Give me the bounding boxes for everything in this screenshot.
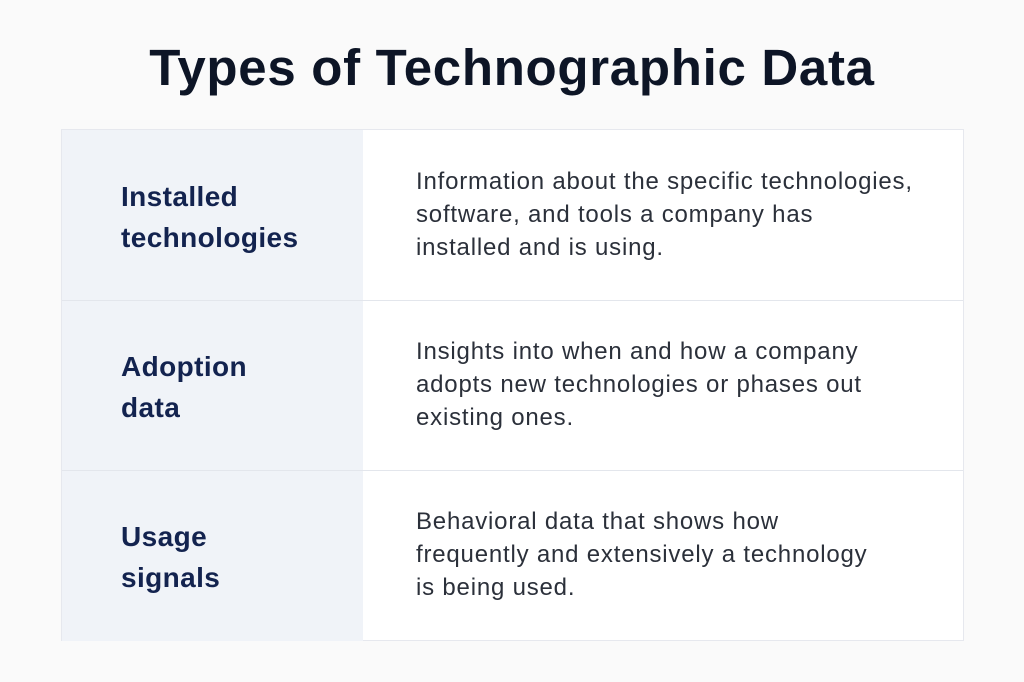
label: installed technologies: technologies bbox=[121, 222, 298, 253]
row: usage signals bbox=[62, 470, 963, 641]
row: adoption data bbox=[62, 300, 963, 471]
description: usage signals: Behavioral data that shows how bbox=[416, 508, 779, 535]
description: adoption data: Insights into when and how a company bbox=[416, 338, 858, 365]
description: installed technologies: Information about the specific technologies, bbox=[416, 168, 913, 195]
label: usage signals: signals bbox=[121, 562, 220, 593]
description: installed technologies: software, and tools a company has bbox=[416, 201, 813, 228]
label: installed technologies bbox=[62, 130, 363, 300]
label: usage signals: Usage bbox=[121, 521, 207, 552]
row: installed technologies bbox=[62, 130, 913, 300]
label: adoption data: data bbox=[121, 392, 180, 423]
description: usage signals: is being used. bbox=[416, 574, 575, 601]
label: adoption data: Adoption bbox=[121, 351, 247, 382]
title: Types of Technographic Data bbox=[149, 39, 875, 96]
label: installed technologies: Installed bbox=[121, 181, 238, 212]
description: usage signals bbox=[416, 508, 867, 601]
table bbox=[61, 129, 964, 641]
description: installed technologies: installed and is using. bbox=[416, 234, 664, 261]
description: usage signals: frequently and extensively a technology bbox=[416, 541, 867, 568]
description: adoption data: adopts new technologies or phases out bbox=[416, 371, 862, 398]
label: usage signals bbox=[62, 471, 363, 641]
label: adoption data bbox=[62, 301, 363, 471]
description: installed technologies bbox=[416, 168, 913, 261]
description: adoption data bbox=[416, 338, 862, 431]
description: adoption data: existing ones. bbox=[416, 404, 574, 431]
